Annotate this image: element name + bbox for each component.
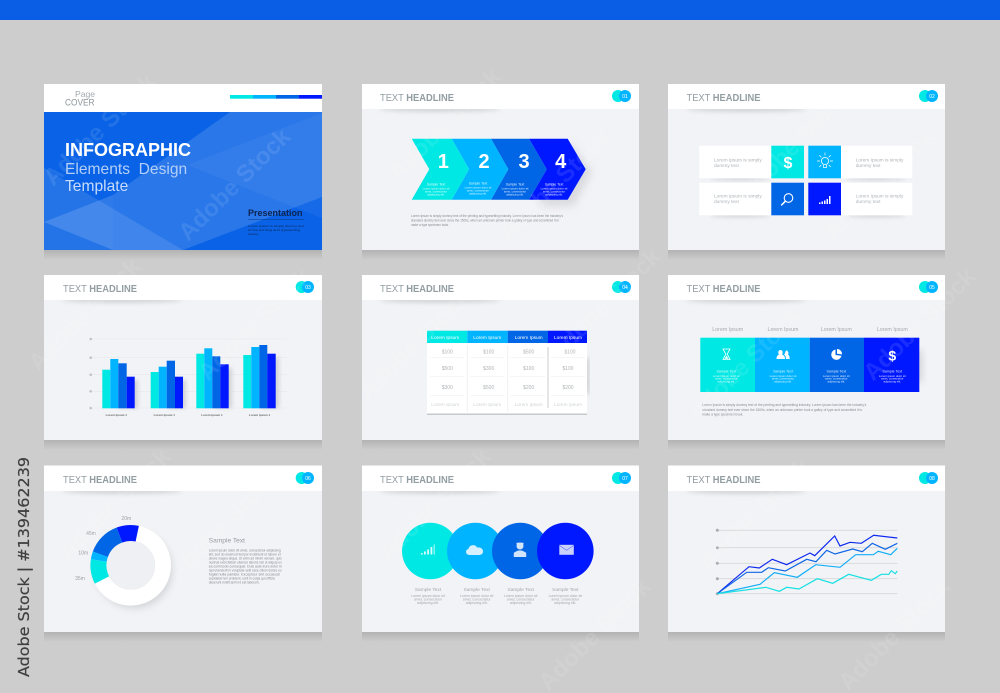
panel: 04 table (362, 275, 639, 450)
chevron captions: Sample Text (427, 182, 445, 186)
column titles: Lorem Ipsum (712, 327, 744, 333)
sample text block: nostrud exercitation ullamco laboris nisi ut aliquip ex (209, 560, 282, 565)
chevron captions: amet, consectetur (467, 188, 489, 192)
strip captions: amet, consectetur (715, 377, 737, 381)
heading: TEXT HEADLINE (380, 474, 454, 486)
watermarks: Adobe Stock (193, 263, 317, 386)
table values: $200 (562, 385, 574, 391)
heading: TEXT HEADLINE (686, 92, 760, 104)
column titles: Lorem Ipsum (877, 327, 908, 333)
text box top left: Lorem Ipsum is simply (714, 158, 762, 164)
paragraph (702, 402, 866, 416)
badge 06: 06 (305, 476, 311, 482)
table values: $500 (523, 350, 534, 356)
badge 04 (612, 281, 631, 293)
strip captions: Lorem ipsum dolor sit (770, 374, 797, 378)
table footer labels: Lorem Ipsum (515, 402, 543, 408)
panel: 05 feature strip (668, 275, 945, 450)
watermarks: Adobe Stock (858, 263, 982, 386)
chevron 3 (491, 139, 547, 200)
strip column 4 (864, 338, 919, 392)
sample text block: reprehenderit in voluptate velit esse cillum dolore eu (209, 568, 282, 573)
strip captions: adipiscing elit. (774, 380, 792, 384)
badge 07 (612, 472, 631, 484)
box shadows (710, 177, 906, 217)
donut labels: 20m (121, 516, 131, 522)
table values: $300 (483, 366, 494, 372)
circle captions: amet, consectetur (414, 598, 443, 602)
circle 2 with cloud icon (447, 523, 504, 579)
panel: 07 circles (362, 466, 639, 642)
table values: $100 (483, 350, 494, 356)
presentation block: industry. (248, 232, 259, 236)
column titles (712, 327, 908, 333)
cover page label: COVER (65, 98, 95, 108)
text box top right (841, 146, 912, 178)
chevron captions (423, 182, 568, 196)
presentation block: Lorem Ipsum is simply dummy text (248, 224, 304, 228)
strip captions: Sample Text (773, 370, 793, 374)
strip captions: Sample Text (716, 370, 736, 374)
table values: $500 (442, 366, 453, 372)
bar group 2 (151, 361, 183, 408)
sample text block: Sample Text (209, 537, 245, 544)
line: deep blue (717, 535, 897, 594)
chevron numbers: 1 (438, 151, 449, 173)
strip captions: adipiscing elit. (828, 380, 845, 384)
donut labels: 45m (86, 531, 96, 537)
circle captions: Sample Text (508, 587, 535, 593)
cover title (65, 140, 191, 195)
watermarks: Adobe Stock (373, 443, 497, 566)
table header: Lorem Ipsum (431, 335, 459, 341)
chevron captions: Sample Text (469, 182, 487, 186)
icon: magnifier (771, 183, 804, 215)
circle captions: Lorem ipsum dolor sit (504, 594, 537, 598)
badge 03 (296, 281, 314, 293)
cover title: INFOGRAPHIC (65, 140, 191, 160)
table footer labels: Lorem Ipsum (473, 402, 501, 408)
table values: $100 (523, 366, 534, 372)
paragraph: make a type specimen book. (702, 412, 743, 416)
strip column 2 (755, 338, 810, 392)
strip captions: adipiscing elit. (718, 380, 735, 384)
line: mid blue (717, 543, 897, 594)
arrow shadow (540, 145, 592, 206)
bar labels: Lorem Ipsum 1 (106, 413, 127, 417)
watermarks: Adobe Stock (38, 68, 162, 191)
circle captions: amet, consectetur (463, 598, 491, 602)
chevron captions: adipiscing elit. (469, 192, 487, 196)
table values: $200 (523, 385, 534, 391)
table body (427, 343, 587, 415)
circle captions: adipiscing elit. (466, 601, 488, 605)
presentation block: Presentation (248, 208, 303, 218)
circle captions: adipiscing elit. (554, 601, 576, 605)
watermarks: Adobe Stock (23, 253, 147, 376)
circle captions: Lorem ipsum dolor sit (460, 594, 493, 598)
chevron captions: amet, consectetur (504, 190, 526, 194)
chevron numbers (438, 151, 567, 173)
sample text block: Lorem ipsum dolor sit amet, consectetur adipiscing (209, 548, 281, 553)
colour stripe (230, 95, 322, 99)
watermarks: Adobe Stock (683, 303, 807, 426)
panel: 01 arrows (362, 84, 639, 260)
panel: 02 icon grid (668, 84, 945, 260)
paragraph: make a type specimen book. (411, 222, 449, 227)
sample text block (209, 537, 282, 585)
chevron captions: amet, consectetur (425, 190, 447, 194)
icon: dollar: $ (784, 155, 793, 172)
paragraph (411, 213, 563, 227)
strip captions: amet, consectetur (772, 377, 794, 381)
heading: TEXT HEADLINE (686, 474, 760, 486)
table header (427, 331, 587, 343)
watermarks: Adobe Stock (353, 283, 477, 406)
strip captions: Lorem ipsum dolor sit (879, 374, 906, 378)
table values (442, 350, 576, 391)
paragraph: Lorem Ipsum is simply dummy text of the printing and typesetting industry. Lorem Ipsum has been the industry's (702, 402, 866, 407)
heading: TEXT HEADLINE (380, 283, 454, 295)
badge 01: 01 (622, 94, 628, 100)
text box bottom right: dummy text (856, 199, 881, 205)
heading: TEXT HEADLINE (63, 474, 137, 486)
icon: dollar (771, 146, 804, 178)
watermarks: Adobe Stock (383, 63, 507, 186)
text box bottom left: Lorem Ipsum is simply (714, 194, 762, 200)
watermarks: Adobe Stock (173, 123, 297, 246)
sample text block: fugiat nulla pariatur. Excepteur sint occaecat (209, 572, 281, 577)
chevron captions: Lorem ipsum dolor sit (541, 186, 568, 190)
bar labels (106, 413, 271, 417)
circle captions: Sample Text (464, 587, 491, 593)
circle 3 with person icon (492, 523, 549, 579)
badge 04: 04 (622, 285, 628, 291)
paragraph: standard dummy text ever since the 1500s, when an unknown printer took a galley of type and scrambled it to (702, 407, 862, 412)
badge 01 (612, 90, 631, 102)
watermarks: Adobe Stock (733, 83, 857, 206)
table values: $100 (442, 350, 453, 356)
icon: light bulb (808, 146, 841, 178)
strip captions: Lorem ipsum dolor sit (713, 374, 740, 378)
text box top left (699, 146, 771, 178)
icon: signal bars (808, 183, 841, 215)
column titles: Lorem Ipsum (768, 327, 799, 333)
cover title: Elements Design (65, 161, 187, 178)
chevron numbers: 2 (478, 151, 490, 173)
badge 06 (296, 472, 314, 484)
bar labels: Lorem Ipsum 1 (249, 413, 271, 417)
table header: Lorem Ipsum (515, 335, 543, 341)
chevron 2 (452, 139, 508, 200)
chevron captions: adipiscing elit. (545, 192, 563, 196)
strip captions: amet, consectetur (825, 377, 847, 381)
heading: TEXT HEADLINE (686, 283, 760, 295)
column titles: Lorem Ipsum (821, 327, 852, 333)
text box bottom left (699, 183, 771, 215)
sample text block: cupidatat non proident, sunt in culpa qui officia (209, 576, 275, 581)
chevron numbers: 4 (555, 151, 567, 173)
circle 1 with signal icon (402, 523, 459, 579)
donut labels: 10m (78, 550, 88, 556)
table values: $500 (483, 385, 494, 391)
bar shadows (118, 358, 279, 408)
bar labels: Lorem Ipsum 1 (201, 413, 223, 417)
panel: 06 donut chart (44, 466, 322, 642)
circle captions: Sample Text (552, 587, 579, 593)
badge 07: 07 (622, 476, 628, 482)
chevron captions: adipiscing elit. (427, 192, 445, 196)
watermarks: Adobe Stock (493, 123, 617, 246)
strip column 1 (700, 338, 755, 392)
circle captions: Lorem ipsum dolor sit (411, 594, 445, 598)
sample text block: ea commodo consequat. Duis aute irure dolor in (209, 564, 282, 569)
chevron captions: Lorem ipsum dolor sit (465, 186, 492, 190)
strip column 3 (810, 338, 864, 392)
text box bottom right (841, 183, 912, 215)
circle captions: adipiscing elit. (510, 601, 532, 605)
circle captions: amet, consectetur (551, 598, 580, 602)
badge 08 (919, 472, 938, 484)
presentation block: of the printing and typesetting (248, 228, 300, 232)
chevron 1 (412, 139, 469, 200)
panel: 08 line chart (668, 466, 945, 642)
strip captions: Sample Text (882, 370, 902, 374)
cover blue background (44, 112, 322, 250)
donut labels: 35m (75, 576, 85, 582)
chevron captions: Sample Text (545, 182, 563, 186)
strip captions: amet, consectetur (881, 377, 903, 381)
cover title: Template (65, 178, 128, 195)
heading: TEXT HEADLINE (63, 283, 137, 295)
bar group 3 (196, 348, 229, 408)
badge 05 (919, 281, 938, 293)
bar group 1 (102, 359, 135, 408)
circle captions: Sample Text (415, 587, 442, 593)
paragraph: standard dummy text ever since the 1500s, when an unknown printer took a galley of type and scrambled it to (411, 218, 559, 222)
chevron captions: adipiscing elit. (506, 192, 524, 196)
donut chart (87, 522, 174, 609)
chevron numbers: 3 (518, 151, 530, 173)
table shadow (586, 358, 589, 394)
strip captions: adipiscing elit. (884, 380, 901, 384)
badge 02: 02 (929, 94, 935, 100)
badge 05: 05 (929, 285, 935, 291)
table values: $100 (562, 366, 574, 372)
table header: Lorem Ipsum (473, 335, 501, 341)
circle captions (411, 587, 582, 605)
table values: $300 (442, 385, 453, 391)
line: cyan (717, 571, 897, 594)
line: sky blue (717, 548, 897, 594)
chevron captions: Sample Text (506, 182, 524, 186)
strip column 4: $ (888, 348, 896, 364)
table header: Lorem Ipsum (554, 335, 582, 341)
watermarks: Adobe Stock (533, 573, 657, 693)
table footer labels: Lorem Ipsum (431, 402, 459, 408)
badge 02 (919, 90, 938, 102)
presentation block (248, 208, 304, 236)
sample text block: dolore magna aliqua. Ut enim ad minim veniam, quis (209, 556, 282, 561)
heading: TEXT HEADLINE (380, 92, 454, 104)
bar group 4 (243, 345, 276, 408)
chevron captions: Lorem ipsum dolor sit (502, 186, 529, 190)
circle 4 with envelope icon (537, 523, 594, 579)
chevron 4 (529, 139, 586, 200)
badge 03: 03 (305, 285, 311, 291)
chart grid (716, 529, 897, 595)
badge 08: 08 (929, 476, 935, 482)
panel: cover slide (44, 84, 322, 260)
table values: $100 (564, 350, 576, 356)
text box top right: dummy text (856, 163, 881, 169)
text box top right: Lorem Ipsum is simply (856, 158, 904, 164)
table footer labels (431, 402, 582, 408)
circle captions: amet, consectetur (507, 598, 535, 602)
table footer labels: Lorem Ipsum (554, 402, 582, 408)
watermarks: Adobe Stock (833, 573, 957, 693)
paragraph: Lorem Ipsum is simply dummy text of the printing and typesetting industry. Lorem Ipsum has been the industry's (411, 213, 563, 218)
strip captions: Lorem ipsum dolor sit (823, 374, 850, 378)
strip captions (713, 370, 906, 384)
bar labels: Lorem Ipsum 1 (154, 413, 175, 417)
chevron captions: amet, consectetur (543, 190, 565, 194)
text box bottom right: Lorem Ipsum is simply (856, 194, 904, 200)
top blue bar (0, 0, 1000, 20)
strip shadow (912, 350, 922, 382)
cover page label (65, 89, 95, 108)
watermarks: Adobe Stock (818, 123, 942, 246)
cover page label: Page (75, 89, 95, 99)
stock id side label: Adobe Stock | #139462239 (15, 457, 33, 677)
circle captions: Lorem ipsum dolor sit (549, 594, 582, 598)
circle captions: adipiscing elit. (417, 601, 439, 605)
text box top left: dummy text (714, 163, 739, 169)
watermarks: Adobe Stock (693, 453, 817, 576)
chevron captions: Lorem ipsum dolor sit (423, 186, 450, 190)
chart axes (89, 338, 287, 409)
strip captions: Sample Text (826, 370, 846, 374)
sample text block: deserunt mollit anim id est laborum. (209, 580, 260, 585)
sample text block: elit, sed do eiusmod tempor incididunt ut labore et (209, 552, 281, 557)
text box bottom left: dummy text (714, 199, 739, 205)
donut labels (75, 516, 131, 582)
watermarks: Adobe Stock (543, 243, 667, 366)
watermarks: Adobe Stock (53, 443, 177, 566)
panel: 03 bar chart (44, 275, 322, 450)
watermarks: Adobe Stock (163, 463, 287, 586)
